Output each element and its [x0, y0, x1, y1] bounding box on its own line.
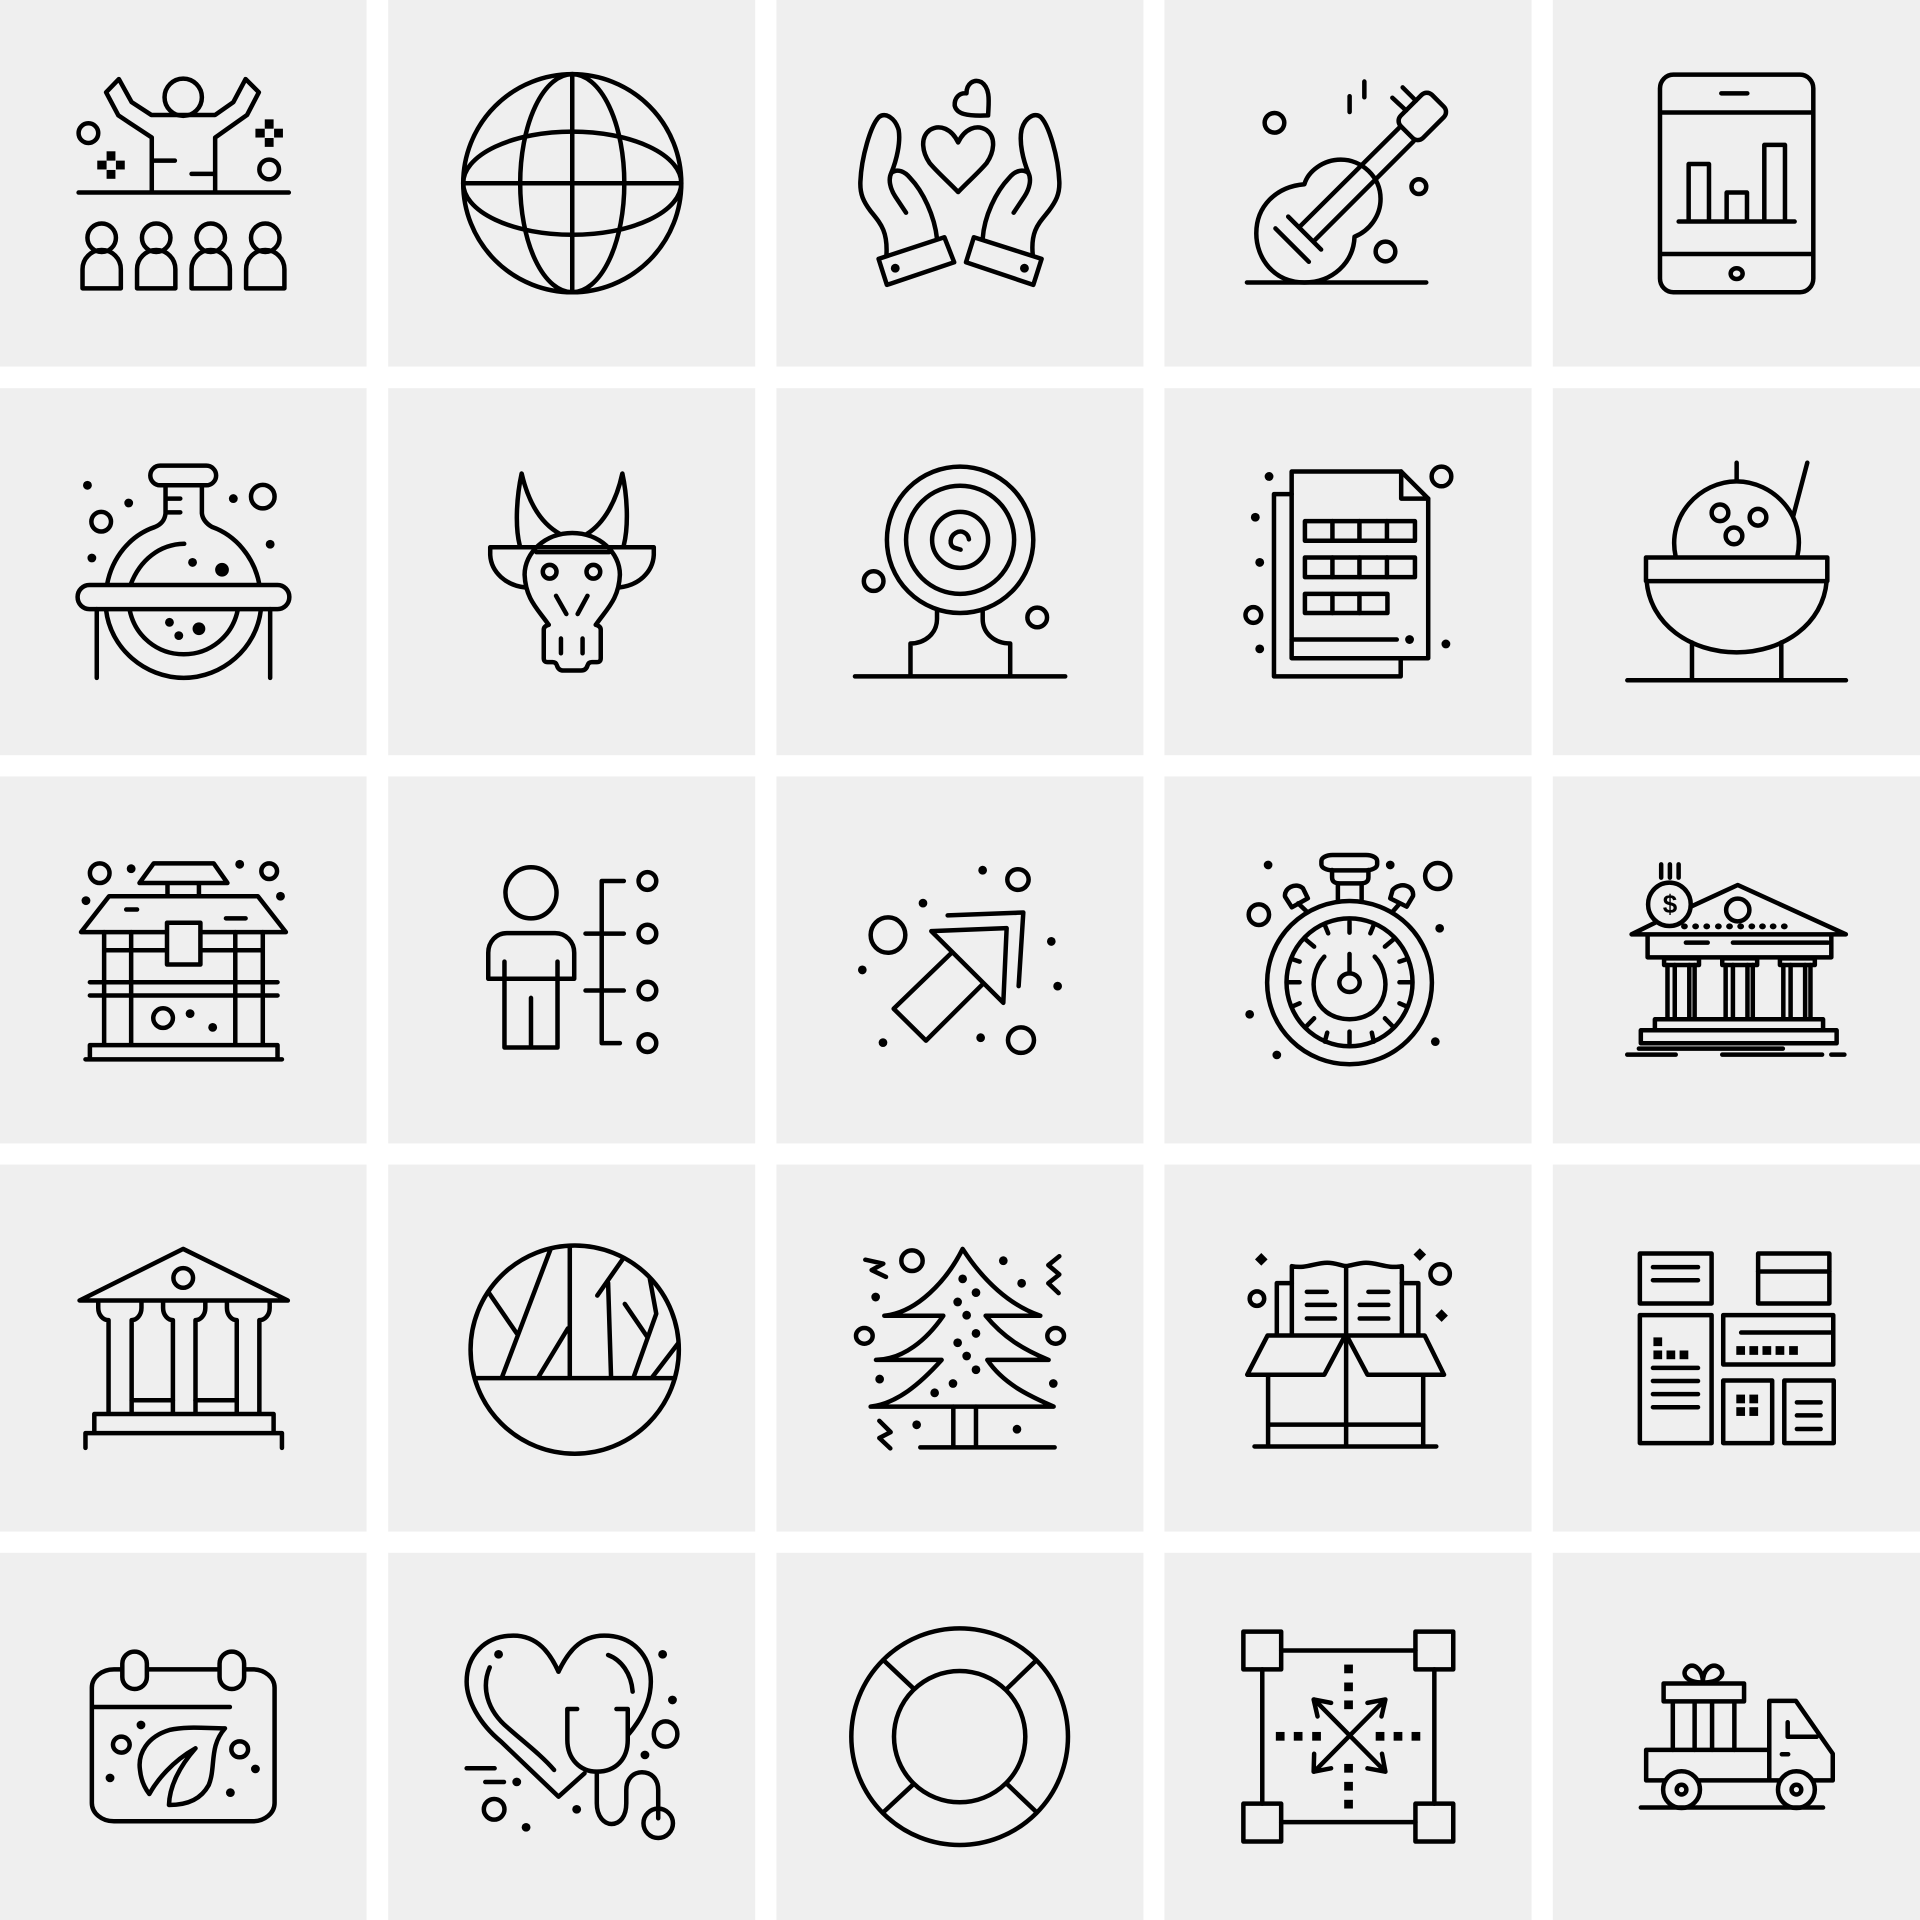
panel: globe	[388, 0, 755, 367]
icon: globe	[463, 74, 681, 292]
icon: layout wireframe cards	[1640, 1254, 1834, 1443]
panel: gift truck	[1553, 1553, 1920, 1920]
panel: layout cards	[1553, 1165, 1920, 1532]
icon: truck with gift	[1641, 1666, 1833, 1808]
panel: bank with dollar	[1553, 776, 1920, 1143]
icon: tablet with bar chart	[1660, 75, 1813, 292]
panel: guitar	[1164, 0, 1532, 367]
panel: wood circle	[388, 1165, 755, 1532]
icon: webcam target	[855, 467, 1065, 676]
icon: bank with dollar coin	[1627, 864, 1846, 1055]
icon: speaker and audience	[79, 79, 289, 288]
panel: bull	[388, 388, 755, 755]
panel: christmas tree	[776, 1165, 1143, 1532]
panel: heart stethoscope	[388, 1553, 755, 1920]
icon: diagonal arrow	[858, 866, 1062, 1053]
icon: chemistry flask	[78, 466, 289, 678]
icon: open box with book	[1247, 1248, 1450, 1446]
panel: person list	[388, 776, 755, 1143]
icon: circle with branches	[471, 1245, 679, 1454]
panel: treasure chest	[0, 776, 367, 1143]
panel: audience speaker	[0, 0, 367, 367]
panel: leaf calendar	[0, 1553, 367, 1920]
panel: tablet chart	[1553, 0, 1920, 367]
icon: heart with stethoscope	[467, 1636, 677, 1838]
icon: house shaped chest	[81, 860, 286, 1059]
icon: ice cream bowl	[1627, 463, 1846, 680]
panel: target	[776, 388, 1143, 755]
panel: classical building	[0, 1165, 367, 1532]
panel: documents	[1164, 388, 1532, 755]
icon: lifebuoy	[851, 1628, 1068, 1845]
icon: guitar	[1247, 82, 1449, 282]
icon: resize selection frame	[1243, 1632, 1453, 1841]
icon: hands holding hearts	[860, 81, 1059, 285]
icon: person with options list	[488, 867, 656, 1052]
panel: flask	[0, 388, 367, 755]
icon: stopwatch	[1245, 855, 1450, 1064]
dollar sign: $	[1663, 889, 1678, 919]
icon: spreadsheet documents	[1245, 467, 1451, 676]
icon: classical building	[80, 1249, 288, 1448]
panel: crop tool	[1164, 1553, 1532, 1920]
panel: lifebuoy	[776, 1553, 1143, 1920]
icon: christmas tree	[856, 1249, 1064, 1448]
panel: book box	[1164, 1165, 1532, 1532]
icon: calendar with leaf	[92, 1652, 275, 1821]
icon: bull skull	[490, 474, 654, 670]
panel: stopwatch	[1164, 776, 1532, 1143]
panel: bowl	[1553, 388, 1920, 755]
panel: arrow	[776, 776, 1143, 1143]
panel: caring hands	[776, 0, 1143, 367]
